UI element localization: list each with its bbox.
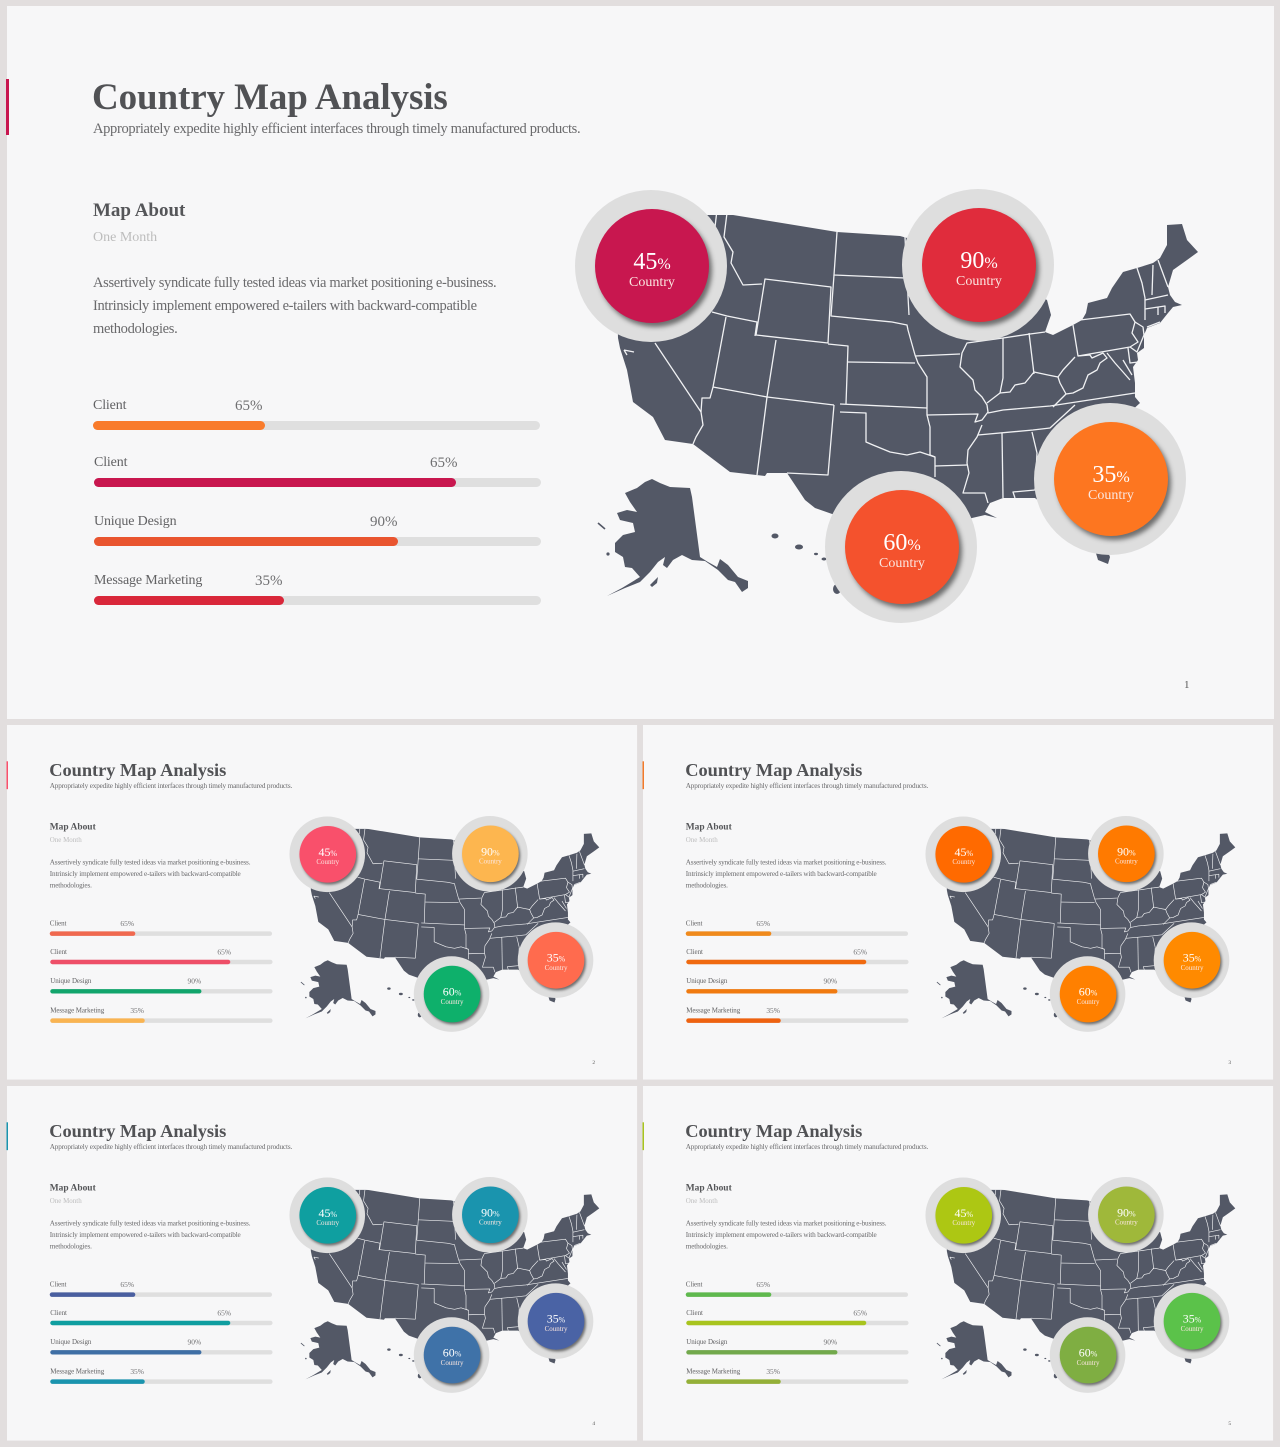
progress bar: client 1 (93, 398, 540, 430)
heading: map about: Map About (50, 1182, 96, 1193)
callout: 90%: 90% (481, 1206, 500, 1219)
body text (686, 859, 886, 890)
progress bar: client 1 (50, 1281, 272, 1297)
progress bar: client 1 (686, 920, 908, 936)
callout: 60%: Country (441, 1360, 463, 1367)
accent bar (7, 761, 8, 789)
map of the United States (936, 828, 1236, 1018)
callout: 90% (902, 189, 1054, 341)
accent bar (643, 761, 644, 789)
title: Country Map Analysis (685, 760, 862, 781)
body text: Intrinsicly implement empowered e-tailers with backward-compatible (50, 870, 241, 878)
progress bar: client 1: Client (50, 920, 66, 927)
progress bar: client 2: 65% (430, 455, 458, 471)
progress bar: unique design (50, 1339, 272, 1354)
subtitle: Appropriately expedite highly efficient interfaces through timely manufactured products. (50, 1143, 292, 1151)
callout: 60% (414, 956, 489, 1032)
title: Country Map Analysis (49, 1121, 226, 1142)
progress bar: client 1: Client (50, 1281, 66, 1288)
progress bar: message marketing: 35% (766, 1368, 780, 1376)
callout: 60%: Country (1077, 999, 1099, 1006)
body text (93, 275, 496, 337)
callout: 60%: Country (441, 999, 463, 1006)
progress bar: client 2: Client (50, 948, 67, 956)
panel: slide 3 orange (643, 725, 1273, 1080)
progress bar: message marketing (94, 573, 541, 605)
callout: 60%: Country (1077, 1360, 1099, 1367)
callout: 60%: 60% (1079, 986, 1097, 999)
page number: 2 (592, 1060, 595, 1066)
progress bar: client 2: Client (686, 1309, 703, 1317)
callout: 60%: 60% (443, 1347, 461, 1360)
callout: 90% (1088, 1177, 1164, 1253)
callout: 45%: Country (952, 1220, 975, 1227)
progress bar: client 1: 65% (756, 1281, 770, 1289)
map of the United States (936, 1190, 1236, 1380)
callout: 45%: Country (316, 1220, 339, 1227)
heading: map about: Map About (686, 821, 732, 832)
callout: 60% (414, 1317, 489, 1393)
body text: methodologies. (686, 1243, 728, 1251)
body text: methodologies. (93, 321, 177, 337)
callout: 90%: Country (1115, 858, 1138, 866)
progress bar: client 1 (50, 920, 272, 936)
callout: 45% (575, 190, 727, 342)
progress bar: unique design (50, 978, 272, 994)
sub-heading: one month: One Month (50, 1197, 82, 1205)
body text (686, 1220, 886, 1251)
progress bar: unique design: Unique Design (94, 514, 176, 529)
callout: 35%: Country (1088, 488, 1134, 503)
callout: 45%: 45% (954, 846, 973, 859)
body text: Assertively syndicate fully tested ideas via market positioning e-business. (50, 859, 250, 867)
callout: 35%: Country (1181, 1326, 1203, 1333)
sub-heading: one month: One Month (50, 836, 82, 844)
progress bar: message marketing (686, 1368, 908, 1384)
body text: Intrinsicly implement empowered e-tailers with backward-compatible (50, 1231, 241, 1239)
progress bar: client 1: 65% (120, 920, 134, 928)
title: Country Map Analysis (49, 760, 226, 781)
progress bar: message marketing (686, 1007, 908, 1023)
callout: 45%: 45% (954, 1207, 973, 1220)
callout: 60% (1050, 956, 1125, 1032)
callout: 45% (925, 817, 1001, 892)
callout: 35% (518, 922, 593, 998)
panel: slide 5 green (643, 1086, 1273, 1441)
callout: 90%: Country (479, 858, 502, 866)
callout: 35% (1154, 1283, 1229, 1359)
progress bar: client 1 (686, 1281, 908, 1297)
map of the United States (300, 828, 600, 1018)
callout: 35% (1154, 922, 1229, 998)
progress bar: client 2 (94, 455, 541, 487)
body text: Intrinsicly implement empowered e-tailers with backward-compatible (93, 298, 477, 314)
map of the United States (598, 215, 1198, 596)
page number: 4 (592, 1421, 595, 1427)
progress bar: message marketing (50, 1368, 272, 1384)
progress bar: client 1: Client (686, 1281, 702, 1288)
progress bar: unique design (686, 1339, 908, 1354)
callout: 60% (1050, 1317, 1125, 1393)
body text: Intrinsicly implement empowered e-tailers with backward-compatible (686, 1231, 877, 1239)
callout: 35% (1034, 403, 1186, 555)
heading: map about: Map About (93, 200, 185, 221)
callout: 45% (925, 1178, 1001, 1253)
callout: 90%: 90% (1117, 845, 1136, 858)
subtitle: Appropriately expedite highly efficient interfaces through timely manufactured products. (93, 121, 580, 137)
progress bar: client 2: 65% (853, 1309, 867, 1317)
callout: 35%: Country (1181, 965, 1203, 972)
callout: 35%: Country (545, 965, 567, 972)
progress bar: message marketing: Message Marketing (50, 1368, 104, 1375)
callout: 90%: 90% (481, 845, 500, 858)
sub-heading: one month: One Month (686, 836, 718, 844)
progress bar: client 2 (686, 1309, 908, 1326)
progress bar: message marketing: Message Marketing (686, 1368, 740, 1375)
progress bar: client 2: Client (686, 948, 703, 956)
callout: 35%: 35% (1183, 952, 1201, 965)
callout: 90% (452, 1177, 528, 1253)
subtitle: Appropriately expedite highly efficient interfaces through timely manufactured products. (50, 782, 292, 790)
progress bar: message marketing: 35% (130, 1007, 144, 1015)
callout: 45%: 45% (318, 846, 337, 859)
progress bar: client 2 (686, 948, 908, 964)
progress bar: message marketing: Message Marketing (50, 1007, 104, 1014)
callout: 90%: Country (479, 1219, 502, 1227)
body text: Assertively syndicate fully tested ideas via market positioning e-business. (50, 1220, 250, 1228)
body text (50, 859, 250, 890)
progress bar: client 2 (50, 948, 272, 964)
progress bar: client 1: Client (93, 398, 126, 413)
body text: methodologies. (50, 1243, 92, 1251)
progress bar: client 2: Client (94, 455, 127, 470)
callout: 45% (289, 817, 365, 892)
panel: main slide (7, 6, 1274, 719)
body text: Assertively syndicate fully tested ideas via market positioning e-business. (686, 1220, 886, 1228)
progress bar: message marketing: Message Marketing (94, 573, 202, 588)
callout: 60%: 60% (883, 530, 921, 556)
body text: Assertively syndicate fully tested ideas via market positioning e-business. (93, 275, 496, 291)
subtitle: Appropriately expedite highly efficient interfaces through timely manufactured products. (686, 782, 928, 790)
progress bar: unique design: 90% (370, 514, 398, 530)
progress bar: unique design (94, 514, 541, 546)
body text: Intrinsicly implement empowered e-tailers with backward-compatible (686, 870, 877, 878)
body text: methodologies. (686, 882, 728, 890)
sub-heading: one month: One Month (686, 1197, 718, 1205)
callout: 90%: 90% (960, 248, 998, 274)
callout: 90%: Country (956, 274, 1002, 289)
progress bar: unique design (686, 978, 908, 994)
panel: slide 2 coral (7, 725, 637, 1080)
progress bar: message marketing: 35% (766, 1007, 780, 1015)
progress bar: message marketing: 35% (130, 1368, 144, 1376)
callout: 35%: 35% (547, 952, 565, 965)
map of the United States (300, 1190, 600, 1380)
page number: 5 (1228, 1421, 1231, 1427)
progress bar: client 1: 65% (120, 1281, 134, 1289)
body text: Assertively syndicate fully tested ideas via market positioning e-business. (686, 859, 886, 867)
progress bar: unique design: 90% (188, 1339, 201, 1347)
progress bar: client 1: Client (686, 920, 702, 927)
progress bar: client 2 (50, 1309, 272, 1326)
callout: 60%: 60% (443, 986, 461, 999)
sub-heading: one month: One Month (93, 230, 157, 245)
progress bar: client 2: 65% (217, 1309, 231, 1317)
heading: map about: Map About (686, 1182, 732, 1193)
callout: 90%: Country (1115, 1219, 1138, 1227)
progress bar: unique design: Unique Design (686, 1339, 727, 1346)
callout: 60%: 60% (1079, 1347, 1097, 1360)
callout: 35%: 35% (1092, 462, 1130, 488)
page number: 3 (1228, 1060, 1231, 1066)
accent bar (7, 1122, 8, 1150)
callout: 45%: 45% (633, 249, 671, 275)
progress bar: client 2: Client (50, 1309, 67, 1317)
accent bar (643, 1122, 644, 1150)
progress bar: message marketing: 35% (255, 573, 282, 589)
body text (50, 1220, 250, 1251)
progress bar: client 1: 65% (756, 920, 770, 928)
accent bar (6, 79, 9, 135)
progress bar: unique design: 90% (824, 978, 837, 986)
progress bar: unique design: Unique Design (50, 978, 91, 985)
subtitle: Appropriately expedite highly efficient interfaces through timely manufactured products. (686, 1143, 928, 1151)
callout: 60%: Country (879, 556, 925, 571)
title: Country Map Analysis (92, 77, 448, 118)
callout: 60% (825, 471, 977, 623)
callout: 35%: 35% (547, 1313, 565, 1326)
callout: 90% (1088, 816, 1164, 892)
page number: 1 (1184, 679, 1190, 691)
panel: slide 4 teal (7, 1086, 637, 1441)
progress bar: unique design: 90% (824, 1339, 837, 1347)
callout: 45%: Country (952, 859, 975, 866)
callout: 35%: Country (545, 1326, 567, 1333)
callout: 90% (452, 816, 528, 892)
progress bar: unique design: Unique Design (686, 978, 727, 985)
callout: 45% (289, 1178, 365, 1253)
progress bar: client 2: 65% (853, 948, 867, 956)
body text: methodologies. (50, 882, 92, 890)
callout: 45%: Country (316, 859, 339, 866)
progress bar: message marketing: Message Marketing (686, 1007, 740, 1014)
callout: 35%: 35% (1183, 1313, 1201, 1326)
callout: 90%: 90% (1117, 1206, 1136, 1219)
progress bar: unique design: 90% (188, 978, 201, 986)
callout: 45%: 45% (318, 1207, 337, 1220)
progress bar: client 1: 65% (235, 398, 262, 414)
heading: map about: Map About (50, 821, 96, 832)
title: Country Map Analysis (685, 1121, 862, 1142)
callout: 35% (518, 1283, 593, 1359)
progress bar: client 2: 65% (217, 948, 231, 956)
progress bar: unique design: Unique Design (50, 1339, 91, 1346)
callout: 45%: Country (629, 275, 675, 290)
progress bar: message marketing (50, 1007, 272, 1023)
